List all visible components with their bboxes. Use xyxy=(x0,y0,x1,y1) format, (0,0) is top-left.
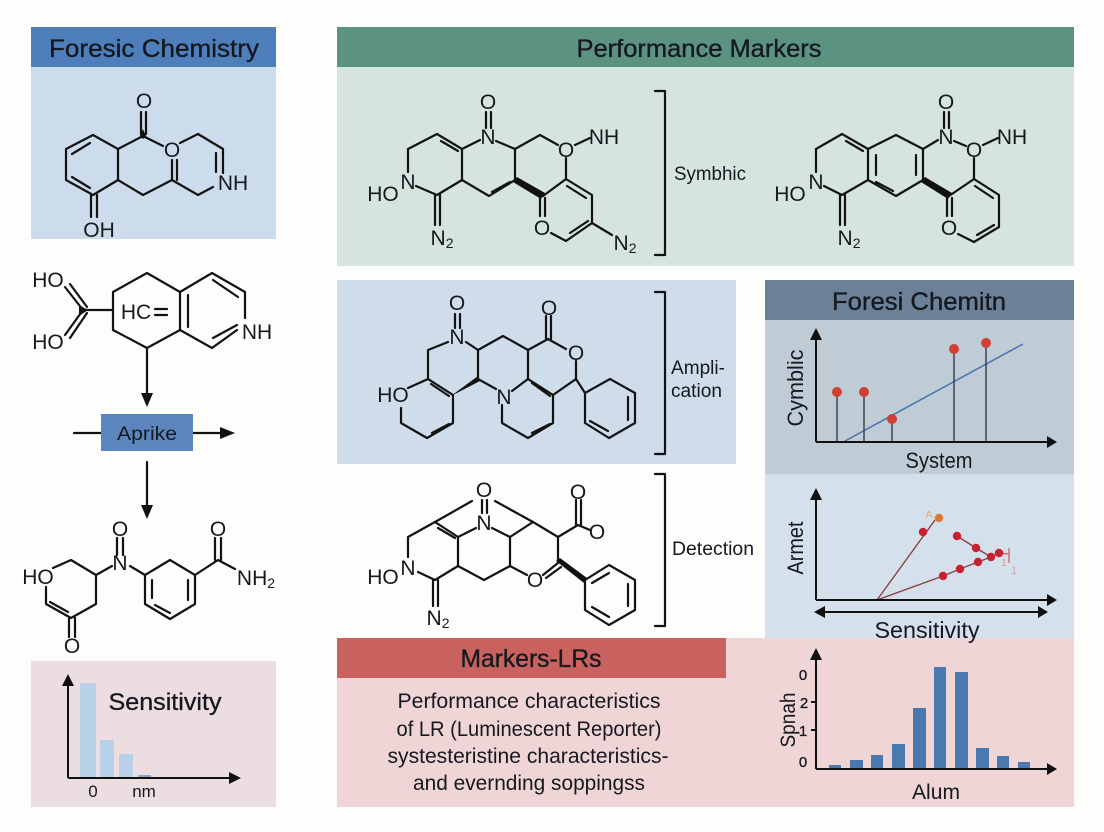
heading: Foresi Chemitn xyxy=(765,280,1074,320)
molecule: performance B: O xyxy=(941,217,957,240)
molecule: performance B: N xyxy=(808,171,824,194)
molecule: top left: O xyxy=(136,90,152,113)
bar chart: sensitivity bars: 0 xyxy=(88,782,98,801)
label: Amplication: cation xyxy=(671,381,722,402)
molecule: performance A: N xyxy=(614,232,629,255)
bracket: symbhic xyxy=(655,91,665,255)
text block: description xyxy=(388,690,669,795)
heading: Markers-LRs: Markers-LRs xyxy=(460,645,602,673)
text block: description: Performance characteristics xyxy=(398,690,660,713)
label: Sensitivity: Sensitivity xyxy=(108,689,222,716)
bar chart: Alum distribution: Alum xyxy=(912,781,960,804)
heading: Foresic Chemistry: Foresic Chemistry xyxy=(49,35,260,63)
panel: line chart sensitivity xyxy=(765,474,1074,638)
heading: Markers-LRs xyxy=(337,638,726,678)
molecule: top left xyxy=(66,90,248,242)
heading: Foresic Chemistry xyxy=(31,27,276,67)
chart: red marker lines: Armet xyxy=(783,522,808,574)
molecule: detection: O xyxy=(589,521,605,544)
panel: markers LRs xyxy=(337,638,1074,807)
bar chart: sensitivity bars: nm xyxy=(132,782,156,801)
molecule: detection: O xyxy=(570,481,586,504)
molecule: performance B: HO xyxy=(774,183,806,206)
text block: description: and evernding soppingss xyxy=(413,772,645,795)
molecule: detection: N xyxy=(400,557,416,580)
chart: red marker lines: 1 xyxy=(1011,565,1017,577)
molecule: amide: NH xyxy=(237,567,267,590)
molecule: detection: N xyxy=(476,512,492,535)
molecule: amide: O xyxy=(112,518,128,541)
molecule: performance A: N xyxy=(400,171,416,194)
molecule: performance A: NH xyxy=(589,126,619,149)
molecule: performance A: 2 xyxy=(629,240,637,256)
molecule: performance A: N xyxy=(480,126,496,149)
molecule: detection: N xyxy=(427,607,442,630)
molecule: performance B: O xyxy=(966,139,982,162)
molecule: amplification: N xyxy=(496,386,512,409)
molecule: performance A: O xyxy=(534,217,550,240)
molecule: top left: NH xyxy=(218,172,248,195)
label: Symbhic: Symbhic xyxy=(674,164,746,185)
molecule: performance A: O xyxy=(558,139,574,162)
panel: sensitivity xyxy=(31,661,276,807)
chart: red marker lines xyxy=(783,488,1057,618)
bar chart: Alum distribution: 0 xyxy=(799,754,807,771)
arrow: down to amide xyxy=(141,462,153,519)
molecule: amide xyxy=(22,518,275,658)
molecule: amide: 2 xyxy=(267,575,275,591)
bar chart: Alum distribution xyxy=(777,648,1057,804)
molecule: top left: OH xyxy=(83,219,115,242)
molecule: carboxyl bicyclic: HC xyxy=(121,301,151,324)
bracket: detection xyxy=(655,474,665,626)
molecule: amide: O xyxy=(64,635,80,658)
molecule: performance B: N xyxy=(938,126,954,149)
bar chart: Alum distribution: 1 xyxy=(799,723,807,740)
panel: forensic chemistry xyxy=(31,27,276,242)
text block: description: systesteristine characteristics- xyxy=(388,745,669,768)
chart: stem points with trend line: Cymblic xyxy=(783,350,808,426)
chart: red marker lines: 1 xyxy=(1001,558,1007,569)
panel: scatter chart symbolic xyxy=(765,280,1074,474)
bar chart: Alum distribution: Spnah xyxy=(777,692,800,748)
molecule: amplification: O xyxy=(449,292,465,315)
text block: description: of LR (Luminescent Reporter) xyxy=(396,718,662,741)
label: Amplication xyxy=(671,358,725,402)
chart: red marker lines: A xyxy=(925,509,933,521)
molecule: amplification: HO xyxy=(377,384,409,407)
panel: performance markers xyxy=(337,27,1074,266)
process box: Aprike xyxy=(74,414,235,451)
molecule: detection: HO xyxy=(367,566,399,589)
label: Amplication: Ampli- xyxy=(671,358,725,379)
molecule: performance A: 2 xyxy=(446,235,454,251)
label: Detection: Detection xyxy=(672,539,754,560)
bracket: amplification xyxy=(655,292,665,454)
molecule: amplification xyxy=(377,292,635,438)
molecule: amplification: N xyxy=(449,326,465,349)
bar chart: Alum distribution: 0 xyxy=(799,667,807,684)
molecule: amide: N xyxy=(112,552,128,575)
bar chart: sensitivity bars xyxy=(62,674,241,801)
heading: Foresi Chemitn: Foresi Chemitn xyxy=(832,288,1006,316)
arrow: down to Aprike xyxy=(141,348,153,407)
molecule: amplification: O xyxy=(541,297,557,320)
molecule: amplification: O xyxy=(568,342,584,365)
heading: Performance Markers: Performance Markers xyxy=(576,35,822,63)
panel: amplification xyxy=(337,280,736,464)
bar chart: Alum distribution: 2 xyxy=(800,695,808,712)
molecule: performance B xyxy=(774,91,1027,251)
molecule: amide: HO xyxy=(22,566,54,589)
molecule: performance B: NH xyxy=(997,126,1027,149)
molecule: performance A: O xyxy=(480,91,496,114)
process box: Aprike: Aprike xyxy=(117,424,177,445)
molecule: carboxyl bicyclic: HO xyxy=(32,331,64,354)
molecule: performance B: 2 xyxy=(853,235,861,251)
molecule: carboxyl bicyclic: HO xyxy=(32,269,64,292)
molecule: performance B: N xyxy=(838,227,853,250)
molecule: performance A xyxy=(367,91,637,256)
molecule: detection: O xyxy=(527,569,543,592)
molecule: carboxyl bicyclic xyxy=(32,269,272,354)
molecule: amide: O xyxy=(210,518,226,541)
molecule: detection xyxy=(367,479,635,631)
chart: stem points with trend line: System xyxy=(906,448,972,473)
label: Sensitivity axis: Sensitivity xyxy=(874,617,980,643)
molecule: detection: O xyxy=(476,479,492,502)
molecule: top left: O xyxy=(164,139,180,162)
chart: stem points with trend line xyxy=(783,328,1057,473)
molecule: performance A: N xyxy=(431,227,446,250)
molecule: carboxyl bicyclic: NH xyxy=(242,321,272,344)
molecule: performance B: O xyxy=(938,91,954,114)
molecule: detection: 2 xyxy=(442,615,450,631)
heading: Performance Markers xyxy=(337,27,1074,67)
molecule: performance A: HO xyxy=(367,183,399,206)
